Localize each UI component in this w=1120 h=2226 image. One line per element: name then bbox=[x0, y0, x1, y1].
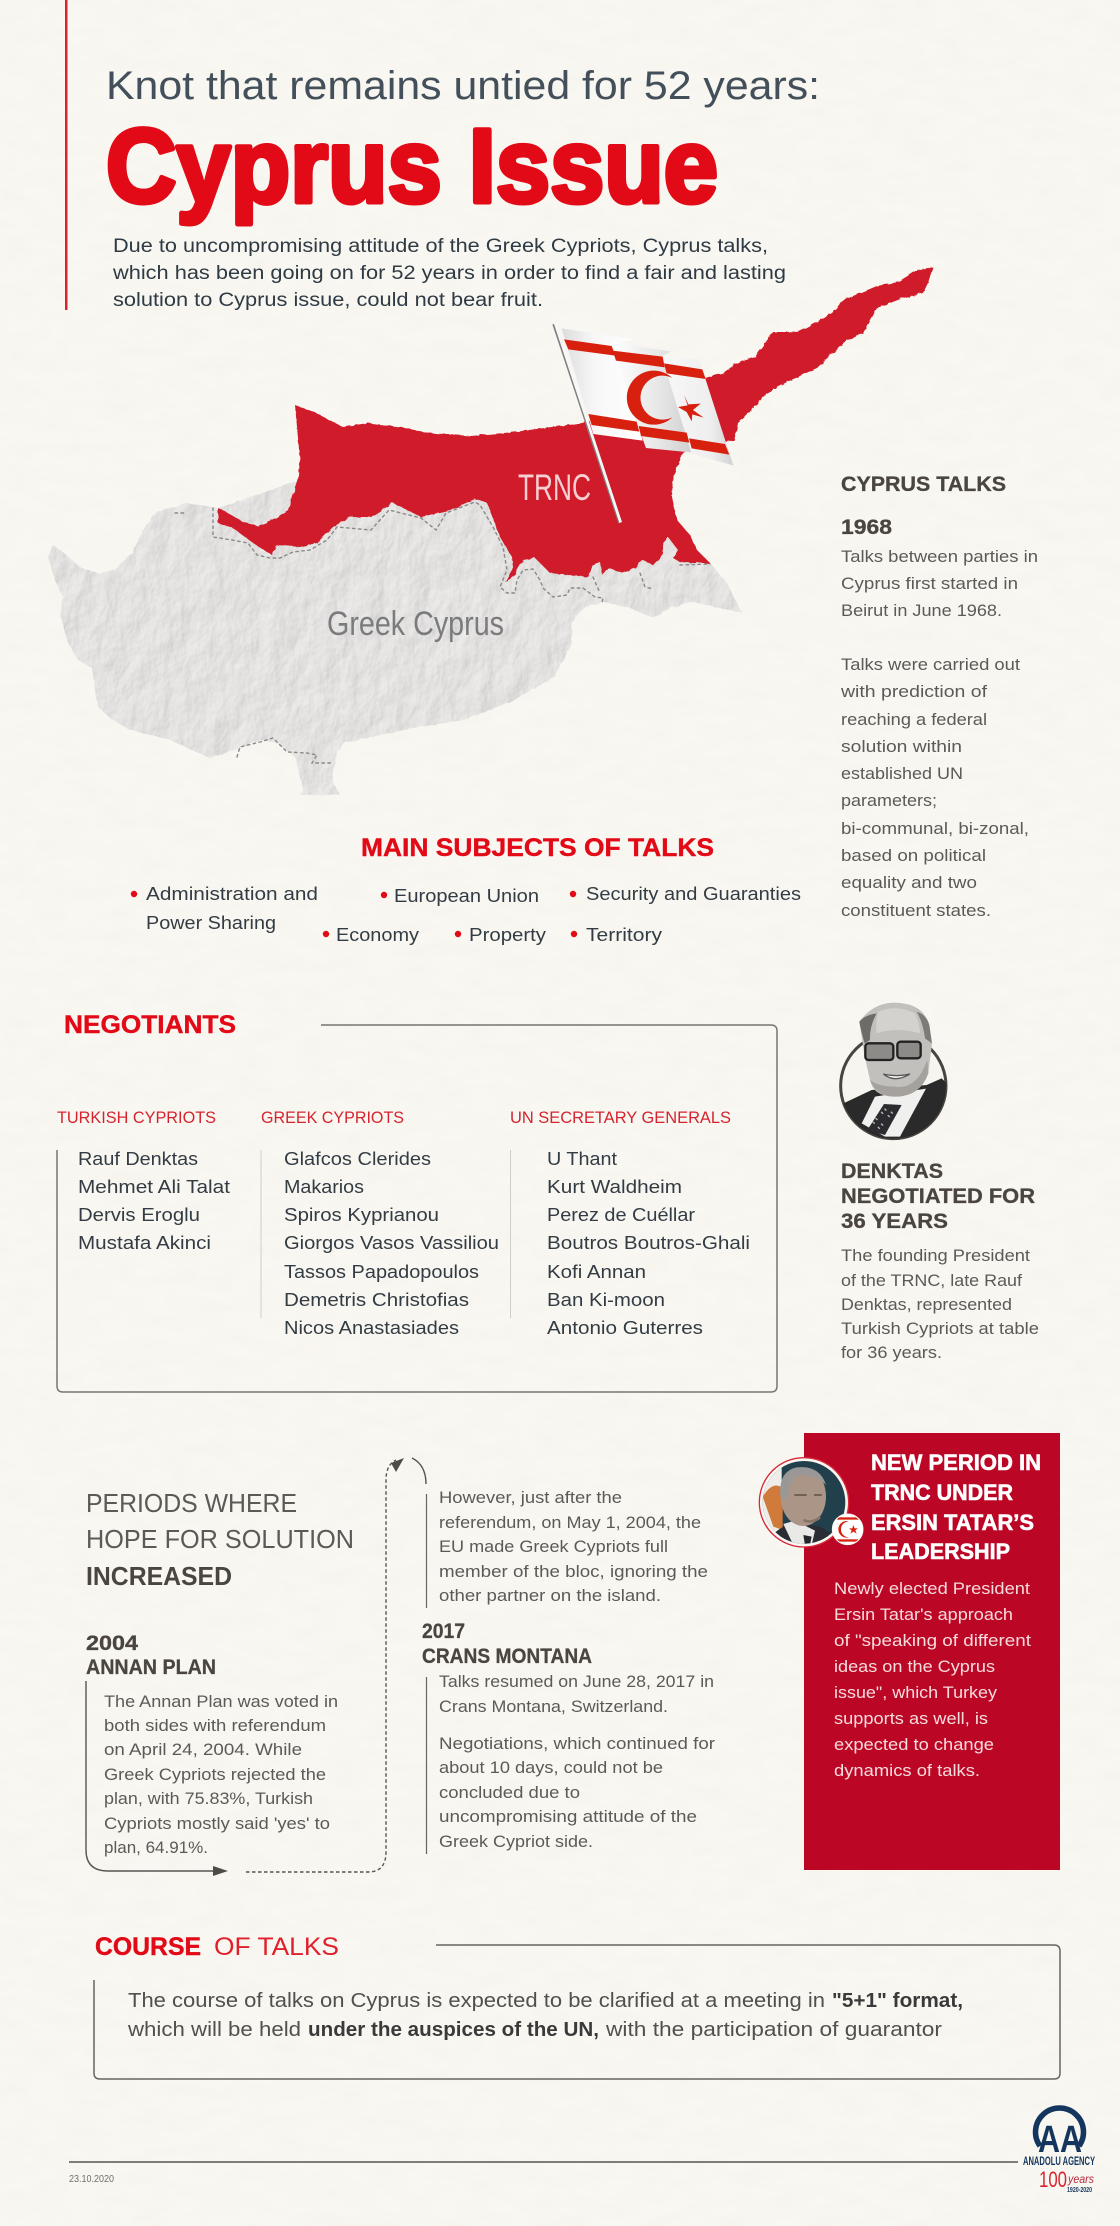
panel: main subjects of talks bbox=[131, 834, 801, 945]
text: Denktas description bbox=[841, 1246, 1039, 1362]
text: Crans Montana: concluded due to bbox=[439, 1783, 580, 1802]
bullet list of subjects bbox=[131, 884, 801, 945]
column: UN Secretary Generals: Antonio Guterres bbox=[547, 1318, 703, 1338]
panel: Denktas bbox=[840, 1003, 1039, 1362]
column: Greek Cypriots bbox=[261, 1108, 499, 1338]
text: federal solution: with prediction of bbox=[840, 682, 987, 701]
portrait: Rauf Denktas bbox=[840, 1003, 953, 1143]
text: federal solution: bi-communal, bi-zonal, bbox=[841, 819, 1029, 838]
label: Greek Cyprus: Greek Cyprus bbox=[327, 605, 504, 643]
main title: Cyprus Issue bbox=[106, 108, 718, 225]
footer date: 23.10.2020 bbox=[69, 2174, 114, 2185]
text: Denktas description: Turkish Cypriots at table bbox=[841, 1319, 1039, 1338]
text: Crans Montana: about 10 days, could not be bbox=[439, 1758, 663, 1777]
text: Crans Montana: uncompromising attitude of the bbox=[439, 1807, 697, 1826]
heading: Cyprus talks: CYPRUS TALKS bbox=[841, 473, 1006, 496]
panel: Cyprus talks sidebar bbox=[840, 473, 1038, 920]
text: Crans Montana: Negotiations, which continued for bbox=[439, 1734, 715, 1753]
column: Greek Cypriots: Giorgos Vasos Vassiliou bbox=[284, 1233, 499, 1253]
column: UN Secretary Generals: UN SECRETARY GENERALS bbox=[510, 1108, 731, 1127]
icon: TRNC flag bbox=[552, 324, 733, 523]
heading: Denktas negotiated for 36 years bbox=[841, 1160, 1035, 1233]
text: new period body: expected to change bbox=[834, 1735, 994, 1754]
text: after the referendum: referendum, on May 1, 2004, the bbox=[439, 1513, 701, 1532]
column: Turkish Cypriots bbox=[57, 1108, 230, 1253]
text: federal solution: equality and two bbox=[841, 873, 977, 892]
column: Turkish Cypriots: TURKISH CYPRIOTS bbox=[57, 1108, 216, 1127]
heading: 2017 Crans Montana bbox=[422, 1620, 592, 1668]
text: course of talks body: under the auspices of the UN, bbox=[308, 2019, 599, 2041]
logo: 100 years: 100 bbox=[1039, 2167, 1067, 2192]
column: Greek Cypriots: Makarios bbox=[284, 1177, 364, 1197]
map: dotted borders bbox=[175, 502, 710, 763]
portrait: Ersin Tatar bbox=[759, 1458, 850, 1547]
text: federal solution: Talks were carried out bbox=[841, 655, 1020, 674]
heading: new period: TRNC UNDER bbox=[871, 1480, 1013, 1505]
text: course of talks body bbox=[127, 1990, 963, 2041]
text: new period body: of "speaking of different bbox=[834, 1631, 1031, 1650]
icon: TRNC flag badge bbox=[830, 1514, 867, 1545]
text: after the referendum bbox=[439, 1488, 708, 1605]
text: Annan Plan: plan, with 75.83%, Turkish bbox=[104, 1789, 313, 1808]
text: after the referendum: other partner on the island. bbox=[439, 1586, 661, 1605]
heading: course of talks: OF TALKS bbox=[214, 1933, 339, 1961]
column: Greek Cypriots: Spiros Kyprianou bbox=[284, 1205, 439, 1225]
column: UN Secretary Generals: Kurt Waldheim bbox=[547, 1177, 682, 1197]
bullet list of subjects: Power Sharing bbox=[146, 913, 276, 933]
text: talks first started bbox=[841, 547, 1038, 620]
header: title block bbox=[106, 64, 820, 311]
column: UN Secretary Generals: U Thant bbox=[547, 1149, 617, 1169]
arrow: timeline from 2004 bbox=[86, 1681, 228, 1876]
heading: new period: NEW PERIOD IN bbox=[871, 1450, 1041, 1475]
heading: course of talks: COURSE bbox=[95, 1933, 201, 1961]
course box outline bbox=[94, 1945, 1060, 2079]
text: Annan Plan: Greek Cypriots rejected the bbox=[104, 1765, 326, 1784]
decorative red header rule bbox=[65, 0, 68, 310]
heading: new period bbox=[871, 1450, 1041, 1564]
text: Crans Montana: Greek Cypriot side. bbox=[439, 1832, 593, 1851]
text: federal solution: established UN bbox=[841, 764, 963, 783]
logo: 100 years: 1920-2020 bbox=[1067, 2187, 1092, 2194]
text: new period body: supports as well, is bbox=[834, 1709, 988, 1728]
text: Denktas description: Denktas, represented bbox=[841, 1295, 1012, 1314]
column: UN Secretary Generals: Perez de Cuéllar bbox=[547, 1205, 695, 1225]
intro paragraph bbox=[112, 236, 786, 311]
heading: periods bbox=[86, 1488, 354, 1591]
red panel background bbox=[804, 1433, 1060, 1870]
text: federal solution: reaching a federal bbox=[841, 710, 987, 729]
text: course of talks body: The course of talks on Cyprus is expected to be clarified at a meeting in bbox=[128, 1990, 825, 2012]
text: Denktas description: of the TRNC, late Rauf bbox=[841, 1271, 1022, 1290]
intro paragraph: Due to uncompromising attitude of the Greek Cypriots, Cyprus talks, bbox=[113, 236, 768, 257]
text: talks first started: Cyprus first started in bbox=[841, 574, 1018, 593]
text: new period body: ideas on the Cyprus bbox=[834, 1657, 995, 1676]
arrow: dashed timeline to 2017 bbox=[246, 1458, 426, 1872]
kicker headline: Knot that remains untied for 52 years: bbox=[106, 64, 820, 108]
text: federal solution: solution within bbox=[841, 737, 962, 756]
column: Greek Cypriots: Glafcos Clerides bbox=[284, 1149, 431, 1169]
map of Cyprus bbox=[48, 267, 933, 795]
text: course of talks body: with the participation of guarantor bbox=[605, 2019, 942, 2041]
bullet list of subjects: European Union bbox=[394, 886, 539, 906]
year: 1968: 1968 bbox=[841, 516, 892, 539]
logo mark: AA letters: AA bbox=[1038, 2119, 1082, 2161]
text: course of talks body: "5+1" format, bbox=[832, 1990, 963, 2012]
column: UN Secretary Generals: Boutros Boutros-Ghali bbox=[547, 1233, 750, 1253]
column: Greek Cypriots: Nicos Anastasiades bbox=[284, 1318, 459, 1338]
column: Greek Cypriots: Tassos Papadopoulos bbox=[284, 1262, 479, 1282]
panel: course of talks bbox=[94, 1933, 1060, 2079]
text: Annan Plan: on April 24, 2004. While bbox=[104, 1740, 302, 1759]
heading: main subjects: MAIN SUBJECTS OF TALKS bbox=[361, 834, 714, 862]
column: Turkish Cypriots: Mehmet Ali Talat bbox=[78, 1177, 230, 1197]
text: course of talks body: which will be held bbox=[127, 2019, 301, 2041]
text: Crans Montana bbox=[439, 1672, 715, 1851]
label: TRNC: TRNC bbox=[518, 467, 591, 508]
bullet list of subjects: Administration and bbox=[146, 884, 318, 904]
text: new period body bbox=[834, 1579, 1031, 1780]
text: Crans Montana: Crans Montana, Switzerland. bbox=[439, 1697, 668, 1716]
heading: 2004 Annan Plan bbox=[86, 1632, 216, 1679]
text: Denktas description: The founding President bbox=[841, 1246, 1030, 1265]
text: Annan Plan: The Annan Plan was voted in bbox=[104, 1692, 338, 1711]
logo mark: dome bbox=[1036, 2108, 1084, 2146]
text: federal solution: constituent states. bbox=[841, 901, 991, 920]
column: Greek Cypriots: GREEK CYPRIOTS bbox=[261, 1108, 404, 1127]
footer rule bbox=[69, 2161, 1018, 2163]
heading: periods: PERIODS WHERE bbox=[86, 1488, 297, 1518]
heading: Denktas negotiated for 36 years: DENKTAS bbox=[841, 1160, 943, 1183]
text: federal solution: parameters; bbox=[841, 791, 937, 810]
text: Crans Montana: Talks resumed on June 28, 2017 in bbox=[439, 1672, 714, 1691]
text: new period body: issue", which Turkey bbox=[834, 1683, 998, 1702]
intro paragraph: solution to Cyprus issue, could not bear fruit. bbox=[113, 290, 543, 311]
logo: 100 years: years bbox=[1067, 2172, 1094, 2186]
column: UN Secretary Generals: Ban Ki-moon bbox=[547, 1290, 665, 1310]
intro paragraph: which has been going on for 52 years in order to find a fair and lasting bbox=[112, 263, 786, 284]
map: Greek Cyprus region bbox=[48, 480, 742, 795]
heading: new period: ERSIN TATAR’S bbox=[871, 1510, 1034, 1535]
text: federal solution bbox=[840, 655, 1029, 920]
text: Annan Plan bbox=[104, 1692, 338, 1857]
text: federal solution: based on political bbox=[841, 846, 986, 865]
heading: new period: LEADERSHIP bbox=[871, 1539, 1010, 1564]
logo: Anadolu Agency bbox=[1023, 2108, 1095, 2194]
text: after the referendum: EU made Greek Cypriots full bbox=[439, 1537, 668, 1556]
panel: new period under Ersin Tatar bbox=[759, 1433, 1060, 1870]
heading: course of talks bbox=[95, 1933, 339, 1961]
text: Denktas description: for 36 years. bbox=[841, 1343, 942, 1362]
logo: 100 years bbox=[1039, 2167, 1094, 2194]
column: Turkish Cypriots: Mustafa Akinci bbox=[78, 1233, 211, 1253]
text: new period body: Ersin Tatar's approach bbox=[834, 1605, 1013, 1624]
text: Annan Plan: Cypriots mostly said 'yes' to bbox=[104, 1814, 330, 1833]
text: after the referendum: member of the bloc, ignoring the bbox=[439, 1562, 708, 1581]
panel: negotiants bbox=[57, 1011, 777, 1392]
negotiants box outline bbox=[57, 1025, 777, 1392]
map: TRNC region bbox=[218, 267, 933, 582]
panel: periods where hope increased bbox=[86, 1458, 715, 1876]
bullet list of subjects: Security and Guaranties bbox=[586, 884, 801, 904]
text: new period body: dynamics of talks. bbox=[834, 1761, 980, 1780]
heading: Denktas negotiated for 36 years: NEGOTIATED FOR bbox=[841, 1185, 1035, 1208]
text: talks first started: Beirut in June 1968. bbox=[841, 601, 1002, 620]
heading: 2004 Annan Plan: 2004 bbox=[86, 1632, 138, 1655]
bullet list of subjects: Property bbox=[469, 925, 546, 945]
text: talks first started: Talks between parties in bbox=[841, 547, 1038, 566]
heading: 2004 Annan Plan: ANNAN PLAN bbox=[86, 1656, 216, 1679]
heading: periods: INCREASED bbox=[86, 1561, 232, 1591]
heading: negotiants: NEGOTIANTS bbox=[64, 1011, 236, 1039]
bullet list of subjects: Territory bbox=[586, 925, 662, 945]
text: Annan Plan: both sides with referendum bbox=[104, 1716, 326, 1735]
text: Annan Plan: plan, 64.91%. bbox=[104, 1838, 208, 1857]
heading: periods: HOPE FOR SOLUTION bbox=[86, 1524, 354, 1554]
heading: Denktas negotiated for 36 years: 36 YEARS bbox=[841, 1210, 948, 1233]
text: new period body: Newly elected President bbox=[834, 1579, 1030, 1598]
bullet list of subjects: Economy bbox=[336, 925, 419, 945]
text: after the referendum: However, just after the bbox=[439, 1488, 622, 1507]
column: Greek Cypriots: Demetris Christofias bbox=[284, 1290, 469, 1310]
column: Turkish Cypriots: Rauf Denktas bbox=[78, 1149, 198, 1169]
column: Turkish Cypriots: Dervis Eroglu bbox=[78, 1205, 200, 1225]
heading: 2017 Crans Montana: CRANS MONTANA bbox=[422, 1645, 592, 1668]
heading: 2017 Crans Montana: 2017 bbox=[422, 1620, 465, 1643]
column: UN Secretary Generals bbox=[510, 1108, 750, 1338]
column: UN Secretary Generals: Kofi Annan bbox=[547, 1262, 646, 1282]
